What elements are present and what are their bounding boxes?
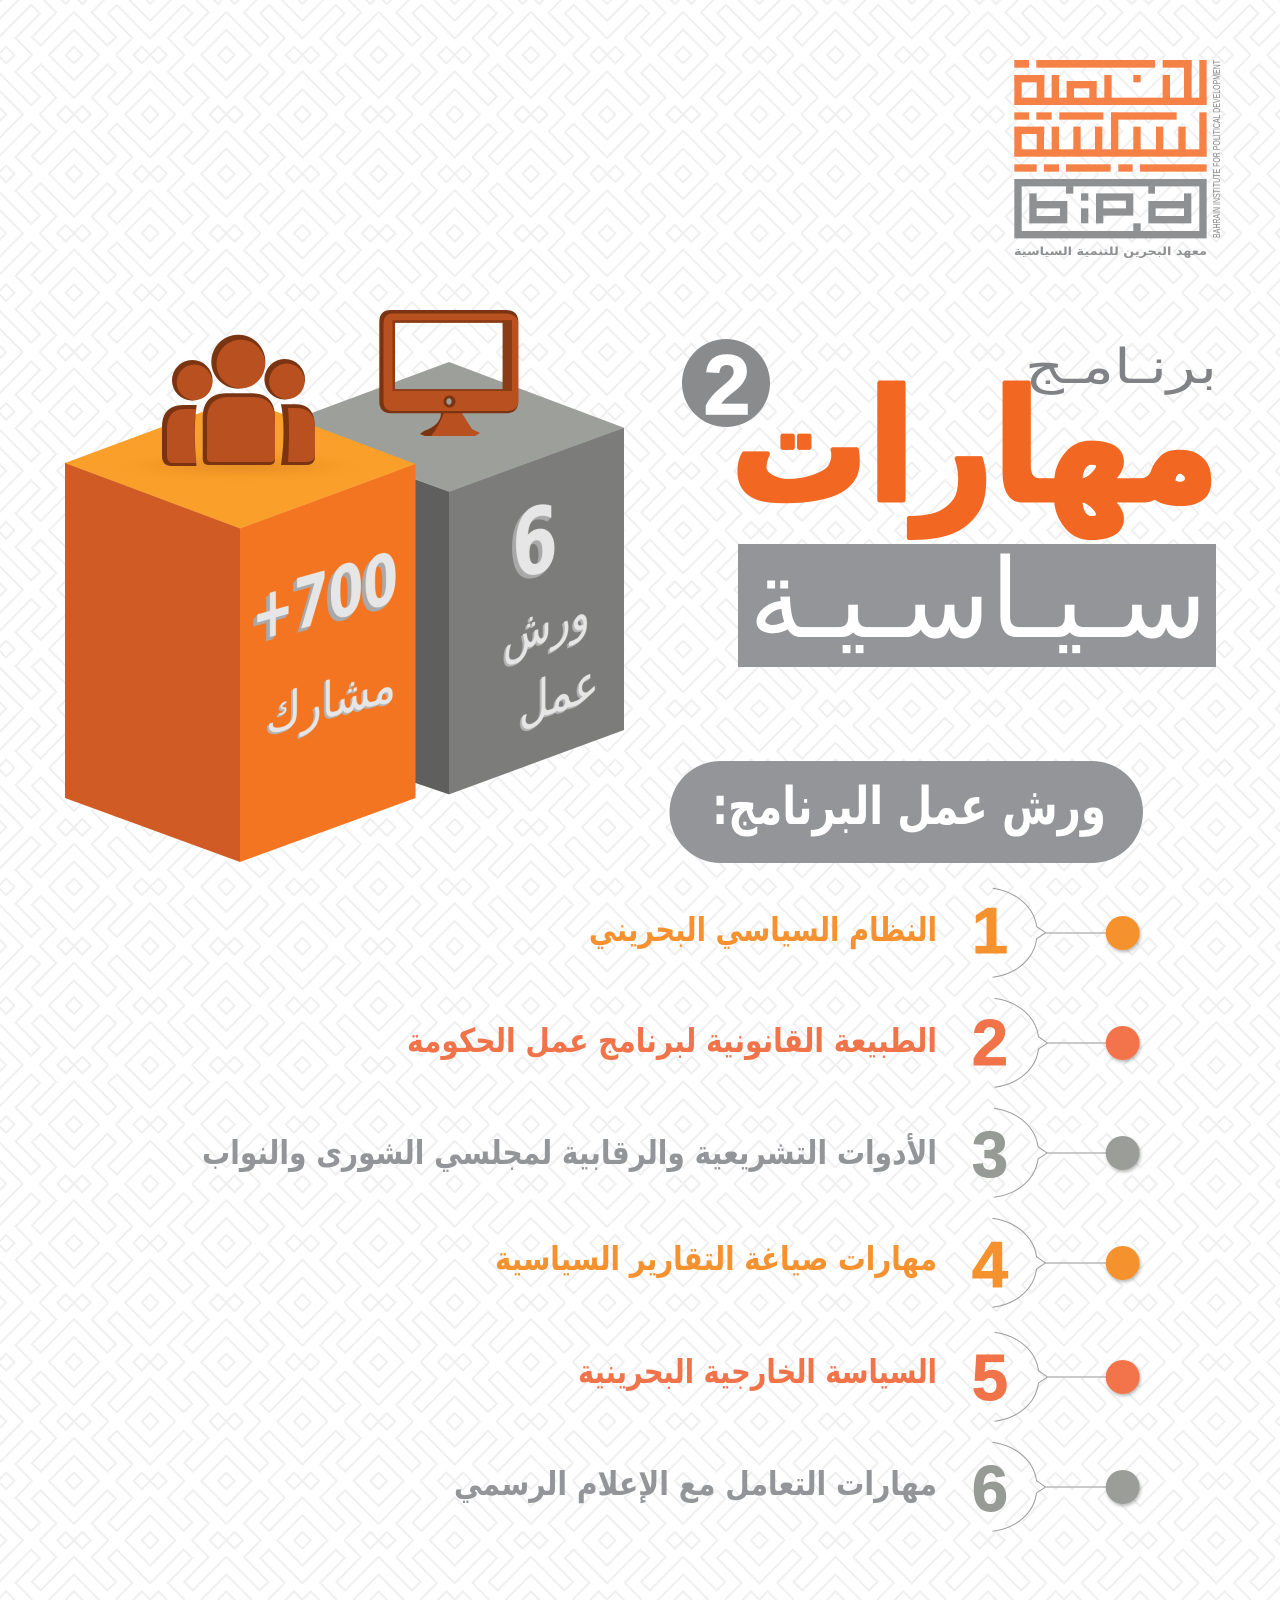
label work: عمل (519, 649, 599, 737)
label workshops: ورش (503, 581, 590, 668)
item 3 text: الأدوات التشريعية والرقابية لمجلسي الشورى والنواب (202, 1132, 937, 1173)
item 1 dot (1106, 916, 1140, 950)
heading pill (670, 761, 1143, 863)
item 2 number: 2 (972, 1006, 1008, 1079)
shadow under people icon (115, 456, 365, 476)
list item 5 (578, 1332, 1140, 1421)
logo arabic name: معهد البحرين للتنمية السياسية (1014, 244, 1207, 258)
logo mark (1014, 60, 1207, 238)
item 6 bracket (992, 1442, 1046, 1531)
item 3 number: 3 (972, 1118, 1008, 1191)
item 4 connector (1046, 1262, 1112, 1264)
monitor camera hole (444, 396, 456, 408)
list item 1 (589, 888, 1140, 977)
list item 4 (495, 1218, 1140, 1307)
monitor stand (420, 413, 480, 436)
item 3 bracket (994, 1108, 1047, 1197)
monitor frame back (379, 310, 518, 413)
title band (738, 544, 1216, 667)
item 1 number: 1 (972, 894, 1008, 967)
logo grey bipd box (1014, 179, 1207, 238)
monitor frame face (384, 314, 518, 411)
item 1 connector (1046, 932, 1112, 934)
item 2 connector (1048, 1042, 1112, 1044)
grey cube right face (449, 428, 624, 794)
item 1 text: النظام السياسي البحريني (589, 910, 937, 950)
item 6 dot (1106, 1470, 1140, 1504)
title: skills: مهارات (731, 358, 1219, 538)
icon: people (162, 335, 315, 466)
number 700+: +700 (252, 536, 398, 659)
orange cube right face (240, 464, 416, 862)
item 5 connector (1048, 1376, 1112, 1378)
list item 2 (407, 998, 1140, 1087)
icon: monitor (379, 310, 518, 436)
title block (682, 338, 1219, 667)
item 5 dot (1106, 1360, 1140, 1394)
list item 3 (202, 1108, 1140, 1197)
grey cube top (274, 362, 624, 492)
item 5 bracket (994, 1332, 1048, 1421)
orange cube: participants (65, 398, 416, 862)
orange cube left face (65, 463, 240, 862)
item 4 dot (1106, 1246, 1140, 1280)
item 6 text: مهارات التعامل مع الإعلام الرسمي (454, 1464, 937, 1504)
item 5 number: 5 (972, 1341, 1008, 1414)
grey cube left face (395, 472, 449, 794)
orange cube top (65, 398, 416, 528)
badge 2 (682, 338, 770, 432)
badge circle (682, 339, 770, 427)
item 3 dot (1106, 1136, 1140, 1170)
item 1 bracket (993, 888, 1046, 977)
item 4 text: مهارات صياغة التقارير السياسية (495, 1239, 937, 1279)
pill text: ورش عمل البرنامج: (712, 777, 1106, 837)
item 5 text: السياسة الخارجية البحرينية (578, 1352, 937, 1392)
title: program: برنـامـج (1025, 339, 1217, 395)
item 4 number: 4 (972, 1228, 1008, 1301)
item 2 bracket (994, 998, 1048, 1087)
right body (281, 404, 315, 465)
left body (162, 405, 197, 466)
item 6 number: 6 (972, 1452, 1008, 1525)
list item 6 (454, 1442, 1140, 1531)
item 2 dot (1106, 1026, 1140, 1060)
item 3 connector (1047, 1152, 1112, 1154)
center head (211, 335, 265, 389)
logo (1014, 60, 1223, 258)
badge number: 2 (704, 338, 750, 432)
item 4 bracket (992, 1218, 1046, 1307)
item 2 text: الطبيعة القانونية لبرنامج عمل الحكومة (407, 1021, 937, 1061)
number 6: 6 (512, 484, 558, 599)
title: political: سـيـاسـيـة (749, 535, 1207, 663)
monitor inner bevel (392, 320, 512, 391)
left head (172, 360, 213, 401)
grey cube: workshops (274, 362, 624, 794)
pill background (670, 761, 1143, 863)
logo orange calligraphy (1014, 60, 1207, 172)
item 6 connector (1046, 1486, 1112, 1488)
center body (203, 393, 275, 465)
right head (264, 359, 305, 400)
label participant: مشارك (266, 654, 396, 746)
